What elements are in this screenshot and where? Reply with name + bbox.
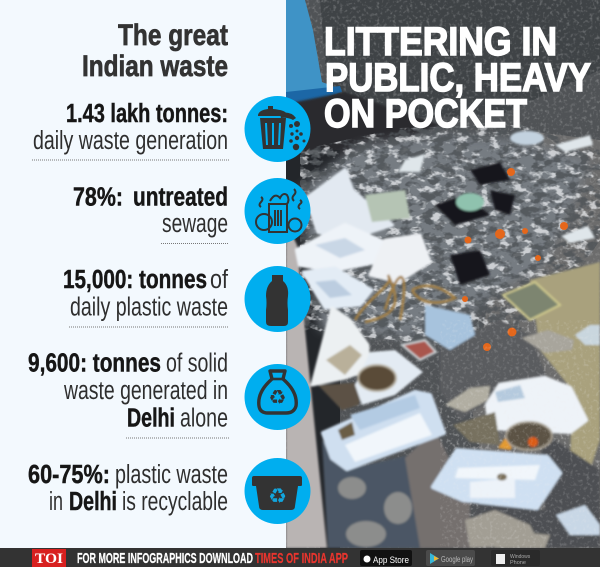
stat: daily plastic waste: of xyxy=(210,266,229,294)
marigolds xyxy=(462,168,568,351)
plastic cup right xyxy=(575,325,600,345)
gravel patch xyxy=(440,320,550,420)
icon: recycling bag: ♻ xyxy=(269,385,286,409)
title: the great Indian waste xyxy=(82,19,228,83)
yellow wet patch xyxy=(530,262,600,470)
blue tarp top left xyxy=(286,0,342,92)
bottom rubble xyxy=(465,510,550,548)
plastic cup xyxy=(425,305,475,350)
title: the great Indian waste: The great xyxy=(118,19,228,52)
plastic bag bottom right xyxy=(556,505,600,535)
stat: solid waste in Delhi: alone xyxy=(180,404,228,432)
jute rope xyxy=(355,275,455,322)
icon: recycling bin: ♻ xyxy=(268,484,287,508)
foam plate A xyxy=(297,225,390,270)
heading: littering in public xyxy=(324,20,591,136)
TOI logo: TOI xyxy=(35,551,63,567)
icon: recycling bin xyxy=(244,458,310,524)
foam plate G xyxy=(487,378,586,432)
stat: daily plastic waste xyxy=(63,266,229,327)
concrete curb left xyxy=(286,222,327,548)
foam plate F xyxy=(433,450,560,508)
road paper pieces xyxy=(398,135,595,243)
stat: recyclable plastic in Delhi: in xyxy=(49,488,63,516)
stat: recyclable plastic in Delhi: Delhi xyxy=(69,488,117,516)
dark debris cluster xyxy=(435,162,515,285)
heading: littering in public: ON POCKET xyxy=(324,92,527,136)
Google Play badge: Google play xyxy=(441,555,473,564)
stat: untreated sewage: 78%: xyxy=(73,184,123,212)
picture card xyxy=(402,340,436,360)
gravel lower right xyxy=(478,438,600,548)
left panel background xyxy=(0,0,286,548)
teal plastic xyxy=(456,193,484,211)
foam plate D xyxy=(355,350,423,405)
gutter shadow xyxy=(286,150,340,548)
footer call to action: FOR MORE INFOGRAPHICS DOWNLOAD xyxy=(77,550,253,567)
yellow banknote xyxy=(503,282,560,320)
foam plate E xyxy=(323,392,444,469)
road grit overlay xyxy=(440,320,600,548)
plate in road xyxy=(510,131,544,145)
large leaf xyxy=(445,386,490,412)
Google Play badge xyxy=(426,550,475,566)
leaf bowl with food xyxy=(358,365,396,391)
title: the great Indian waste: Indian waste xyxy=(82,50,228,83)
white bag xyxy=(370,235,430,282)
stat: daily plastic waste: 15,000: tonnes xyxy=(63,266,207,294)
stones in water xyxy=(338,477,412,547)
Windows Phone badge: Phone xyxy=(510,560,526,566)
App Store badge: App Store xyxy=(373,555,409,565)
debris highlights and shadows xyxy=(286,120,600,350)
stat: recyclable plastic in Delhi: plastic waste xyxy=(115,461,228,489)
stat: solid waste in Delhi: waste generated in xyxy=(63,377,228,405)
central concrete slab xyxy=(405,430,470,548)
icon: recycling bag xyxy=(244,364,310,430)
stat: recyclable plastic in Delhi xyxy=(28,461,228,516)
dark water xyxy=(322,440,420,548)
App Store badge xyxy=(360,550,412,566)
foam plate C with food xyxy=(312,308,370,410)
stat: recyclable plastic in Delhi: is recyclable xyxy=(122,488,228,516)
footer call to action: TIMES OF INDIA APP xyxy=(255,550,348,567)
white plate pile top xyxy=(307,170,392,238)
stat: daily plastic waste: daily plastic waste xyxy=(70,294,228,322)
footer bar xyxy=(0,548,600,567)
leaf bowls cluster xyxy=(453,412,552,450)
icon: overflowing bin with bags xyxy=(244,178,310,244)
road texture flecks xyxy=(286,0,600,548)
Windows Phone badge: Windows xyxy=(510,554,531,560)
stat: solid waste in Delhi: Delhi xyxy=(127,404,175,432)
stat: daily waste generation: daily waste generation xyxy=(33,127,228,155)
road lighter lower right xyxy=(470,130,600,548)
leaf xyxy=(522,330,574,353)
foam plate B xyxy=(303,268,372,308)
map paper xyxy=(365,190,410,222)
softened foreground debris xyxy=(286,131,600,548)
dark debris under tarp xyxy=(295,91,439,161)
photo: littered street xyxy=(286,0,600,548)
stat: recyclable plastic in Delhi: 60-75%: xyxy=(28,461,110,489)
road dark upper band xyxy=(320,0,600,120)
icon: trash can spilling xyxy=(244,96,310,162)
stat: untreated sewage: sewage xyxy=(162,210,228,238)
dark blue tarp strip xyxy=(286,86,342,102)
stat: daily waste generation: 1.43 lakh tonnes: xyxy=(66,100,228,128)
pale debris field xyxy=(300,135,590,340)
stat: untreated sewage: untreated xyxy=(133,184,228,212)
icon: plastic bottle xyxy=(244,266,310,332)
stat: untreated sewage xyxy=(73,184,229,244)
stat: solid waste in Delhi: of solid xyxy=(166,350,228,378)
stat: daily waste generation xyxy=(32,100,229,160)
Windows Phone badge xyxy=(491,550,540,566)
heading: littering in public: LITTERING IN xyxy=(324,20,557,64)
stat: solid waste in Delhi: 9,600: tonnes xyxy=(28,350,161,378)
asphalt road xyxy=(286,0,600,548)
stat: solid waste in Delhi xyxy=(28,350,229,438)
